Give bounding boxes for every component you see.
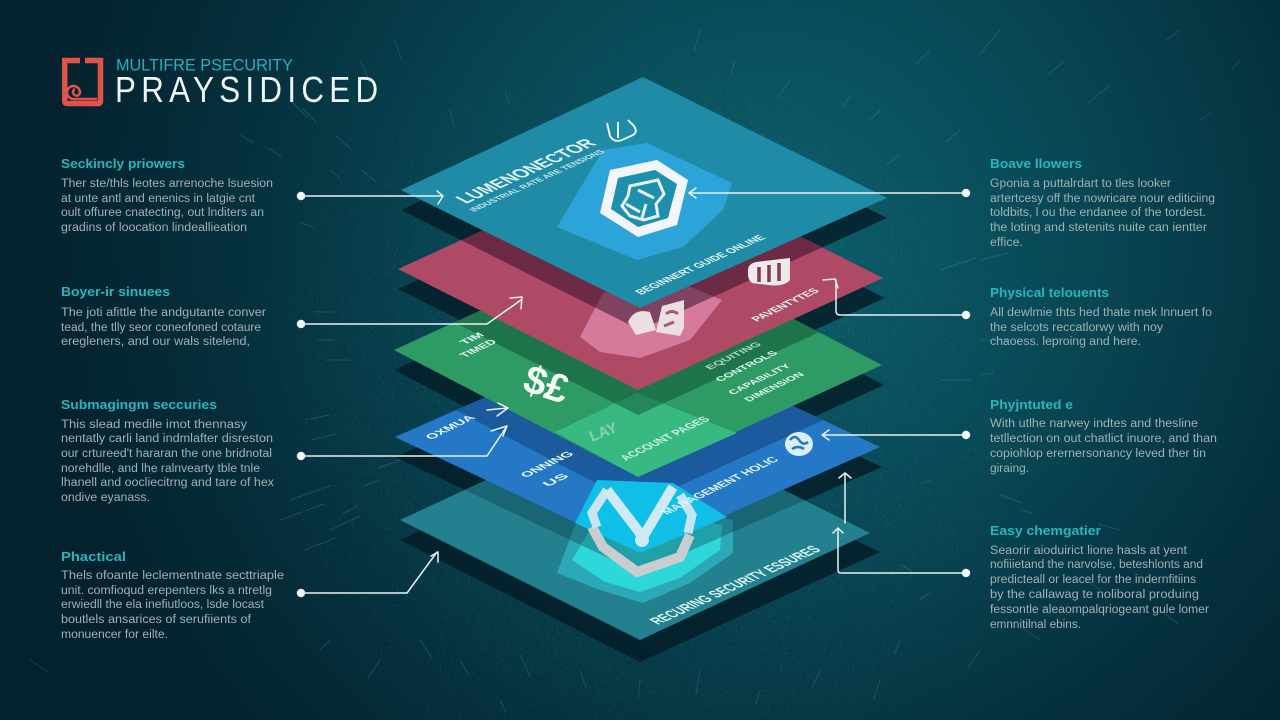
text block: left 3: lhanell and oocliecitrng and tare of hex xyxy=(61,477,274,489)
light green zone xyxy=(555,393,737,477)
text block: right 4: predicteall or leacel for the indernfitiins xyxy=(990,574,1196,586)
layer 1 subtitle: INDUSTRIAL RATE ARE TENSIONS xyxy=(468,149,608,213)
arrows xyxy=(298,188,970,596)
text block: right 4: fessontle aleaompalqriogeant gule lomer xyxy=(990,604,1209,616)
text block: left 2: eregleners, and our wals sitelend, xyxy=(61,336,250,348)
layer 2 label: PAVENTYTES xyxy=(748,287,822,323)
text block: left 4: Thels ofoante leclementnate secttriaple xyxy=(61,570,284,582)
text block: left 3: Submagingm seccuries xyxy=(61,397,217,412)
text block: left 1: gradins of loocation lindeallieation xyxy=(61,222,247,234)
arrow: right 1 xyxy=(689,188,970,198)
layer 2: crimson xyxy=(398,230,883,390)
arrow: right 2 xyxy=(823,279,970,318)
text block: left 4: unit. comfioqud erepenters lks a ntretlg xyxy=(61,585,272,597)
text block: right 3: copiohlop erernersonancy leved ther tin xyxy=(990,448,1206,460)
layer 5: base teal xyxy=(400,480,870,640)
text block: left 2: The joti afittle the andgutante conver xyxy=(61,307,266,319)
text block: left 4 xyxy=(61,549,284,641)
text block: left 3: our crtureed't hararan the one bridnotal xyxy=(61,448,272,460)
text block: left 4: erwiedll the ela inefiutloos, lsde locast xyxy=(61,599,265,611)
text block: right 1: Boave llowers xyxy=(990,156,1082,171)
arrow: left 3 xyxy=(298,403,508,460)
text block: right 3: tetllection on out chatlict inuore, and than xyxy=(990,433,1217,445)
text block: right 4 xyxy=(990,523,1209,631)
white glyph xyxy=(628,300,684,336)
pink shield xyxy=(580,270,722,358)
icon: small u xyxy=(607,120,636,141)
text block: right 1: Gponia a puttalrdart to tles looker xyxy=(990,178,1171,190)
text block: right 3: With utlhe narwey indtes and thesline xyxy=(990,418,1198,430)
text block: left 4: Phactical xyxy=(61,549,126,564)
text block: left 1: oult offuree cnatecting, out lnditers an xyxy=(61,207,264,219)
layer 3: green xyxy=(394,310,882,477)
text block: right 3 xyxy=(990,397,1217,475)
layer 3 right label: DIMENSION xyxy=(742,371,807,403)
arrow: left 4 xyxy=(298,552,438,596)
arrow: right 4 xyxy=(833,473,970,576)
text block: left 4: boutlels ansarices of serufiients of xyxy=(61,614,252,626)
layer 3 centre label: ACCOUNT PAGES xyxy=(617,415,713,462)
logo xyxy=(65,56,378,111)
text block: left 2: tead, the tlly seor coneofoned cotaure xyxy=(61,322,261,334)
logo icon xyxy=(65,60,100,104)
icon: seal xyxy=(785,432,813,456)
text block: right 2: All dewlmie thts hed thate mek lnnuert fo xyxy=(990,307,1212,319)
layer 1 lower label: BEGINNERT GUIDE ONLINE xyxy=(632,233,768,296)
text block: left 3 xyxy=(61,397,274,504)
cyan glow xyxy=(557,500,733,603)
icon: three bars xyxy=(748,258,790,285)
text block: right 4: by the callawag te noliboral produing xyxy=(990,589,1199,601)
layer 4 labels: OXMUA xyxy=(422,413,478,441)
text block: left 3: nentatly carli land indmlafter disreston xyxy=(61,433,273,445)
layer 3: green: TIMED xyxy=(457,338,500,359)
blue glow xyxy=(557,143,732,260)
faint icon: LAY xyxy=(587,419,620,446)
text block: left 1: Seckincly priowers xyxy=(61,156,185,171)
text block: left 1 xyxy=(61,156,273,234)
text block: right 2: the selcots reccatlorwy with noy xyxy=(990,322,1163,334)
text block: right 4: nofiiietand the narvolse, beteshlonts and xyxy=(990,559,1203,571)
arrow: left 2 xyxy=(298,297,522,328)
layer 1: top teal xyxy=(401,77,887,308)
arrow: left 1 xyxy=(298,191,443,204)
layer 4: blue xyxy=(395,397,880,578)
text block: right 1: artertcesy off the nowricare nour editiciing xyxy=(990,193,1215,205)
layer 1 title: LUMENONECTOR xyxy=(450,136,602,206)
text block: left 2: Boyer-ir sinuees xyxy=(61,284,170,299)
text block: right 1 xyxy=(990,156,1215,249)
layer 4: blue: MANAGEMENT HOLIC xyxy=(658,455,782,516)
layer shadows on the background xyxy=(394,97,887,662)
text block: left 3: norehdlle, and lhe ralnvearty tble tnle xyxy=(61,463,260,475)
shield icon xyxy=(592,487,692,572)
text block: right 2: Physical telouents xyxy=(990,285,1109,300)
text block: left 3: ondive eyanass. xyxy=(61,492,150,504)
layer 4: blue: ONNING xyxy=(517,450,577,479)
layer 3 left label: TIM xyxy=(457,331,487,346)
text block: left 1: at unte antl and enenics in latgie cnt xyxy=(61,193,256,205)
text block: right 4: Easy chemgatier xyxy=(990,523,1101,538)
layer 3 right label xyxy=(703,341,807,403)
text block: right 1: toldbits, l ou the endanee of the tordest. xyxy=(990,207,1206,219)
logo wordmark: PRAYSIDICED xyxy=(115,70,378,111)
icon: currency: $£ xyxy=(518,357,574,413)
text block: right 2 xyxy=(990,285,1212,348)
text block: left 2 xyxy=(61,284,266,348)
text block: right 4: emnnitilnal ebins. xyxy=(990,619,1081,631)
text block: left 1: Ther ste/thls leotes arrenoche lsuesion xyxy=(61,178,273,190)
text block: left 4: monuencer for eilte. xyxy=(61,629,168,641)
arrow: right 3 xyxy=(822,430,970,440)
cyan shield zone xyxy=(575,480,727,553)
text block: right 3: Phyjntuted e xyxy=(990,397,1073,412)
text block: right 2: chaoess. leproing and here. xyxy=(990,336,1141,348)
hexagon shield icon xyxy=(600,160,688,237)
layer 3 right label: CONTROLS xyxy=(713,350,781,383)
layer 3 right label: CAPABILITY xyxy=(726,362,795,396)
text block: right 3: giraing. xyxy=(990,463,1029,475)
logo eyebrow: MULTIFRE PSECURITY xyxy=(116,56,293,74)
text block: right 4: Seaorir aioduirict lione hasls at yent xyxy=(990,545,1188,557)
text block: left 3: This slead medile imot thennasy xyxy=(61,419,247,431)
layer 4: blue: US xyxy=(539,472,572,488)
text block: right 1: effice. xyxy=(990,237,1023,249)
text block: right 1: the loting and stetenits nuite can ientter xyxy=(990,222,1207,234)
layer 3 right label: EQUITING xyxy=(703,341,765,371)
layer 5 label: RECURING SECURITY ESSURES xyxy=(646,544,825,627)
